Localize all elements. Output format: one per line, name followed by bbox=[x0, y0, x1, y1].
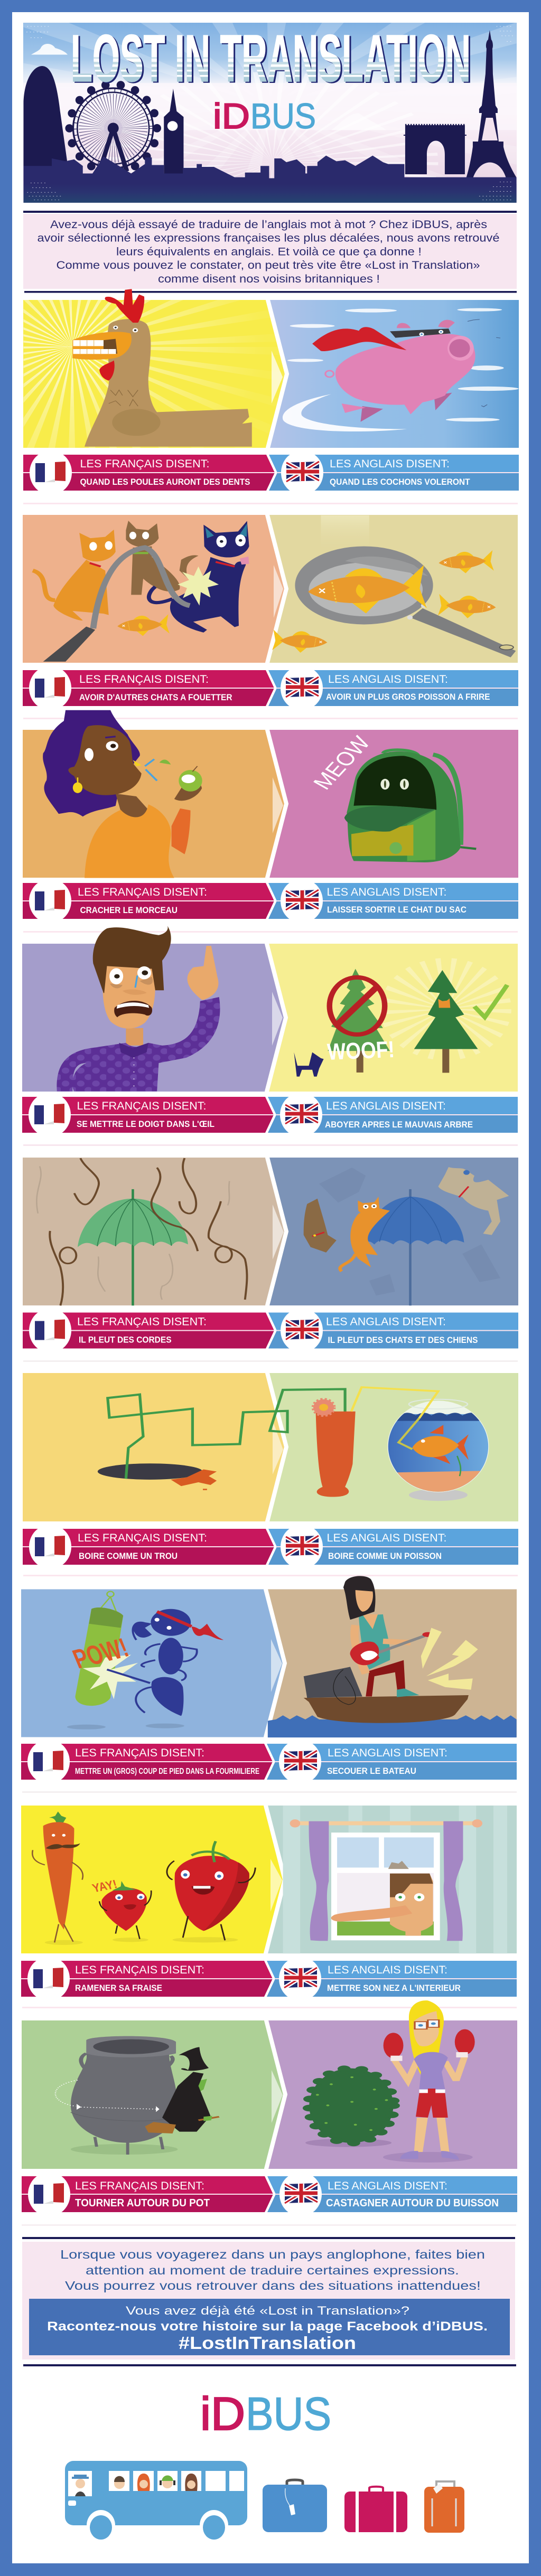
caption band: LES ANGLAIS DISENT: bbox=[328, 673, 448, 685]
iDBUS logo: iD bbox=[213, 96, 250, 136]
caption band: LES ANGLAIS DISENT: bbox=[328, 1746, 447, 1759]
panel 6: boire comme un trou / poisson bbox=[23, 1373, 518, 1569]
caption band: AVOIR UN PLUS GROS POISSON A FRIRE bbox=[326, 692, 490, 702]
icon: blue suitcase bbox=[263, 2480, 327, 2532]
caption band bbox=[23, 666, 518, 710]
closing text bbox=[60, 2248, 485, 2292]
caption band: LES FRANÇAIS DISENT: bbox=[75, 2179, 204, 2192]
caption band: IL PLEUT DES CORDES bbox=[79, 1335, 172, 1345]
illustration: backpack with cat eyes: MEOW bbox=[308, 732, 376, 793]
caption band bbox=[21, 1740, 517, 1784]
closing text: attention au moment de traduire certaines expressions. bbox=[86, 2263, 459, 2277]
caption band: TOURNER AUTOUR DU POT bbox=[75, 2197, 210, 2209]
intro text: comme disent nos voisins britanniques ! bbox=[158, 272, 380, 285]
caption band: CASTAGNER AUTOUR DU BUISSON bbox=[326, 2197, 499, 2209]
caption band: QUAND LES COCHONS VOLERONT bbox=[330, 477, 470, 487]
illustration: man putting nose in window bbox=[283, 1806, 507, 1953]
intro text: avoir sélectionné les expressions françaises les plus décalées, nous avons retrouvé bbox=[37, 232, 500, 245]
panel 4: doigt dans l'oeil / mauvais arbre bbox=[22, 926, 518, 1137]
panel 1: poules / cochons bbox=[23, 289, 519, 491]
caption band: LES FRANÇAIS DISENT: bbox=[80, 457, 209, 470]
call to action box: Racontez-nous votre histoire sur la page Facebook d’iDBUS. bbox=[47, 2319, 488, 2334]
caption band: IL PLEUT DES CHATS ET DES CHIENS bbox=[328, 1335, 478, 1345]
caption band: LES FRANÇAIS DISENT: bbox=[79, 673, 209, 685]
caption band: LES ANGLAIS DISENT: bbox=[326, 1099, 446, 1112]
London Eye bbox=[69, 84, 157, 172]
caption band: LES FRANÇAIS DISENT: bbox=[77, 1099, 206, 1112]
illustration: woman spitting apple bbox=[43, 710, 202, 878]
caption band bbox=[23, 1525, 518, 1569]
illustration: trees, dog, cat bbox=[294, 969, 507, 1077]
illustration: cauldron and witch bbox=[55, 2036, 219, 2155]
illustration: ant kicking punching bag bbox=[67, 1592, 223, 1729]
caption band: LES ANGLAIS DISENT: bbox=[327, 886, 447, 898]
caption band: LES ANGLAIS DISENT: bbox=[330, 457, 450, 470]
intro text: leurs équivalents en anglais. Et voilà ce que ça donne ! bbox=[116, 245, 422, 258]
intro text: Comme vous pouvez le constater, on peut très vite être «Lost in Translation» bbox=[56, 259, 480, 271]
illustration: hole and green straw bbox=[98, 1389, 345, 1490]
illustration: cats, dogs and blue umbrella bbox=[304, 1167, 509, 1305]
illustration: cats and whip bbox=[33, 521, 249, 662]
illustration: carrot and strawberries: YAY! bbox=[91, 1878, 119, 1895]
closing text: Vous pourrez vous retrouver dans des situations inattendues! bbox=[65, 2279, 481, 2292]
footer iDBUS logo: BUS bbox=[246, 2387, 331, 2440]
caption band bbox=[23, 450, 519, 495]
sky rays and skyline illustration bbox=[23, 13, 517, 208]
caption band: BOIRE COMME UN TROU bbox=[79, 1551, 178, 1561]
caption band: LES ANGLAIS DISENT: bbox=[328, 2179, 447, 2192]
icon: orange trolley case bbox=[424, 2481, 464, 2533]
panel 3: morceau / chat du sac bbox=[23, 710, 518, 923]
caption band: METTRE SON NEZ A L'INTERIEUR bbox=[327, 1983, 461, 1993]
caption band: LAISSER SORTIR LE CHAT DU SAC bbox=[327, 905, 467, 915]
call to action box: #LostInTranslation bbox=[179, 2333, 356, 2353]
caption band: AVOIR D'AUTRES CHATS A FOUETTER bbox=[79, 692, 232, 702]
call to action box: Vous avez déjà été «Lost in Translation»? bbox=[126, 2304, 409, 2317]
illustration: ropes and green umbrella bbox=[36, 1158, 247, 1305]
iDBUS logo bbox=[213, 96, 316, 136]
intro text: Avez-vous déjà essayé de traduire de l’anglais mot à mot ? Chez iDBUS, après bbox=[50, 218, 487, 231]
footer iDBUS logo: iD bbox=[200, 2387, 245, 2440]
caption band bbox=[23, 1309, 518, 1353]
header banner bbox=[23, 13, 517, 208]
illustration: man with finger in eye bbox=[57, 926, 220, 1092]
illustration: trees, dog, cat: WOOF! bbox=[327, 1036, 395, 1065]
caption band bbox=[21, 1957, 517, 2001]
intro text bbox=[37, 218, 500, 285]
caption band: BOIRE COMME UN POISSON bbox=[328, 1551, 442, 1561]
caption band: LES ANGLAIS DISENT: bbox=[328, 1963, 447, 1976]
icon: pink suitcase bbox=[344, 2487, 407, 2532]
illustration: rocker on a boat bbox=[268, 1576, 517, 1737]
caption band: ABOYER APRES LE MAUVAIS ARBRE bbox=[325, 1120, 473, 1130]
illustration: backpack with cat eyes bbox=[308, 732, 476, 862]
panel 8: fraise / nez bbox=[21, 1806, 517, 2001]
caption band: LES FRANÇAIS DISENT: bbox=[78, 886, 207, 898]
panel 9: pot / buisson bbox=[22, 2000, 517, 2216]
footer iDBUS logo bbox=[200, 2387, 331, 2440]
panel 7: fourmilière / bateau bbox=[21, 1576, 517, 1784]
caption band: METTRE UN (GROS) COUP DE PIED DANS LA FOURMILIERE bbox=[75, 1767, 259, 1776]
call to action box bbox=[29, 2299, 510, 2355]
caption band: LES FRANÇAIS DISENT: bbox=[75, 1963, 204, 1976]
caption band: LES ANGLAIS DISENT: bbox=[326, 1315, 446, 1328]
caption band bbox=[23, 879, 518, 923]
caption band: SECOUER LE BATEAU bbox=[327, 1766, 416, 1776]
illustration: bush and boxer girl bbox=[305, 2000, 475, 2163]
caption band bbox=[22, 1093, 518, 1137]
illustration: rooster with teeth bbox=[23, 289, 284, 448]
caption band: SE METTRE LE DOIGT DANS L'ŒIL bbox=[77, 1119, 214, 1129]
caption band: LES FRANÇAIS DISENT: bbox=[78, 1531, 207, 1544]
Arc de Triomphe and Eiffel Tower bbox=[404, 30, 516, 182]
iDBUS logo: BUS bbox=[250, 96, 316, 136]
caption band: LES FRANÇAIS DISENT: bbox=[75, 1746, 204, 1759]
illustration: carrot and strawberries bbox=[32, 1811, 255, 1945]
closing panel bbox=[22, 2237, 516, 2366]
panel 2: chats / poisson bbox=[23, 515, 518, 710]
icon: bus with passengers bbox=[65, 2461, 247, 2541]
caption band: LES FRANÇAIS DISENT: bbox=[77, 1315, 207, 1328]
caption band: QUAND LES POULES AURONT DES DENTS bbox=[80, 477, 250, 487]
illustration: ant kicking punching bag: POW! bbox=[69, 1633, 133, 1675]
caption band bbox=[22, 2172, 517, 2216]
caption band: LES ANGLAIS DISENT: bbox=[327, 1531, 447, 1544]
closing text: Lorsque vous voyagerez dans un pays anglophone, faites bien bbox=[60, 2248, 485, 2261]
panel 5: cordes / chats et chiens bbox=[23, 1158, 518, 1353]
illustration: cocktail and goldfish bowl bbox=[313, 1387, 490, 1501]
illustration: flying pig bbox=[283, 308, 519, 431]
caption band: CRACHER LE MORCEAU bbox=[80, 905, 178, 915]
caption band: RAMENER SA FRAISE bbox=[75, 1983, 162, 1993]
intro panel bbox=[23, 211, 517, 293]
illustration: frying pan and fish bbox=[272, 515, 516, 657]
